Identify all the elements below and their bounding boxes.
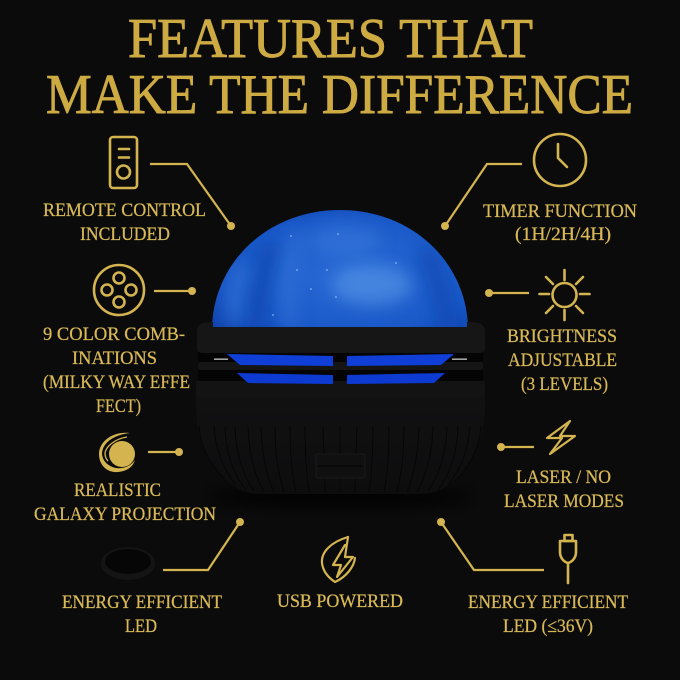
- icon: galaxy: [99, 433, 135, 472]
- icon: palette circle: [94, 265, 144, 315]
- icon: clock: [534, 134, 586, 186]
- label: (MILKY WAY EFFE: [43, 372, 190, 393]
- icon: bolt in leaf: [322, 537, 355, 582]
- label: (1H/2H/4H): [515, 224, 611, 245]
- upper collar: [197, 322, 485, 353]
- title: [46, 8, 633, 126]
- label: (3 LEVELS): [521, 374, 608, 395]
- label: [483, 201, 637, 245]
- label: 9 COLOR COMB-: [43, 324, 185, 345]
- icon: sun: [540, 270, 590, 320]
- label: BRIGHTNESS: [507, 326, 617, 347]
- label: [43, 324, 190, 417]
- feature: USB powered: [277, 537, 403, 612]
- button panel: [316, 454, 365, 478]
- label: ENERGY EFFICIENT: [468, 592, 628, 613]
- icon: remote: [110, 137, 137, 188]
- blue dome: [212, 210, 468, 328]
- vent band with blue light slots: [198, 352, 483, 384]
- leader line: [148, 448, 183, 456]
- icon: USB plug: [560, 535, 576, 583]
- label: [34, 480, 216, 525]
- leader line: [437, 518, 544, 570]
- feature: remote control: [43, 137, 235, 245]
- label: ADJUSTABLE: [508, 350, 617, 371]
- label: USB POWERED: [277, 591, 403, 612]
- label: GALAXY PROJECTION: [34, 504, 216, 525]
- feature: laser modes: [497, 421, 624, 512]
- label: [62, 592, 222, 637]
- title: FEATURES THAT: [128, 8, 533, 70]
- label: ENERGY EFFICIENT: [62, 592, 222, 613]
- feature: brightness: [485, 270, 617, 395]
- label: LED: [125, 616, 157, 637]
- label: INATIONS: [72, 348, 157, 369]
- leader line: [497, 443, 534, 451]
- leader line: [154, 287, 196, 295]
- leader line: [441, 164, 522, 230]
- label: TIMER FUNCTION: [483, 201, 637, 222]
- label: [468, 592, 628, 637]
- label: [507, 326, 617, 395]
- label: REMOTE CONTROL: [43, 200, 206, 221]
- leader line: [485, 289, 529, 297]
- icon: dark ring: [101, 547, 155, 580]
- lower collar ring: [196, 380, 485, 398]
- label: FECT): [96, 396, 141, 417]
- feature: timer: [441, 134, 637, 245]
- product: galaxy projector lamp: [196, 210, 485, 506]
- title: MAKE THE DIFFERENCE: [46, 64, 633, 126]
- feature: galaxy projection: [34, 433, 216, 525]
- feature: color combinations: [43, 265, 196, 417]
- label: REALISTIC: [74, 480, 161, 501]
- label: INCLUDED: [80, 224, 170, 245]
- label: [504, 467, 624, 512]
- feature: low voltage LED: [437, 518, 628, 637]
- label: LASER / NO: [516, 467, 611, 488]
- lower housing: [196, 384, 485, 494]
- leader line: [163, 518, 244, 570]
- feature: energy efficient LED: [62, 518, 244, 637]
- floor shadow: [205, 488, 475, 506]
- icon: lightning bolt: [547, 421, 575, 454]
- label: LASER MODES: [504, 491, 624, 512]
- leader line: [150, 164, 235, 230]
- label: LED (≤36V): [503, 616, 593, 637]
- ribs: [199, 426, 481, 492]
- label: [43, 200, 206, 245]
